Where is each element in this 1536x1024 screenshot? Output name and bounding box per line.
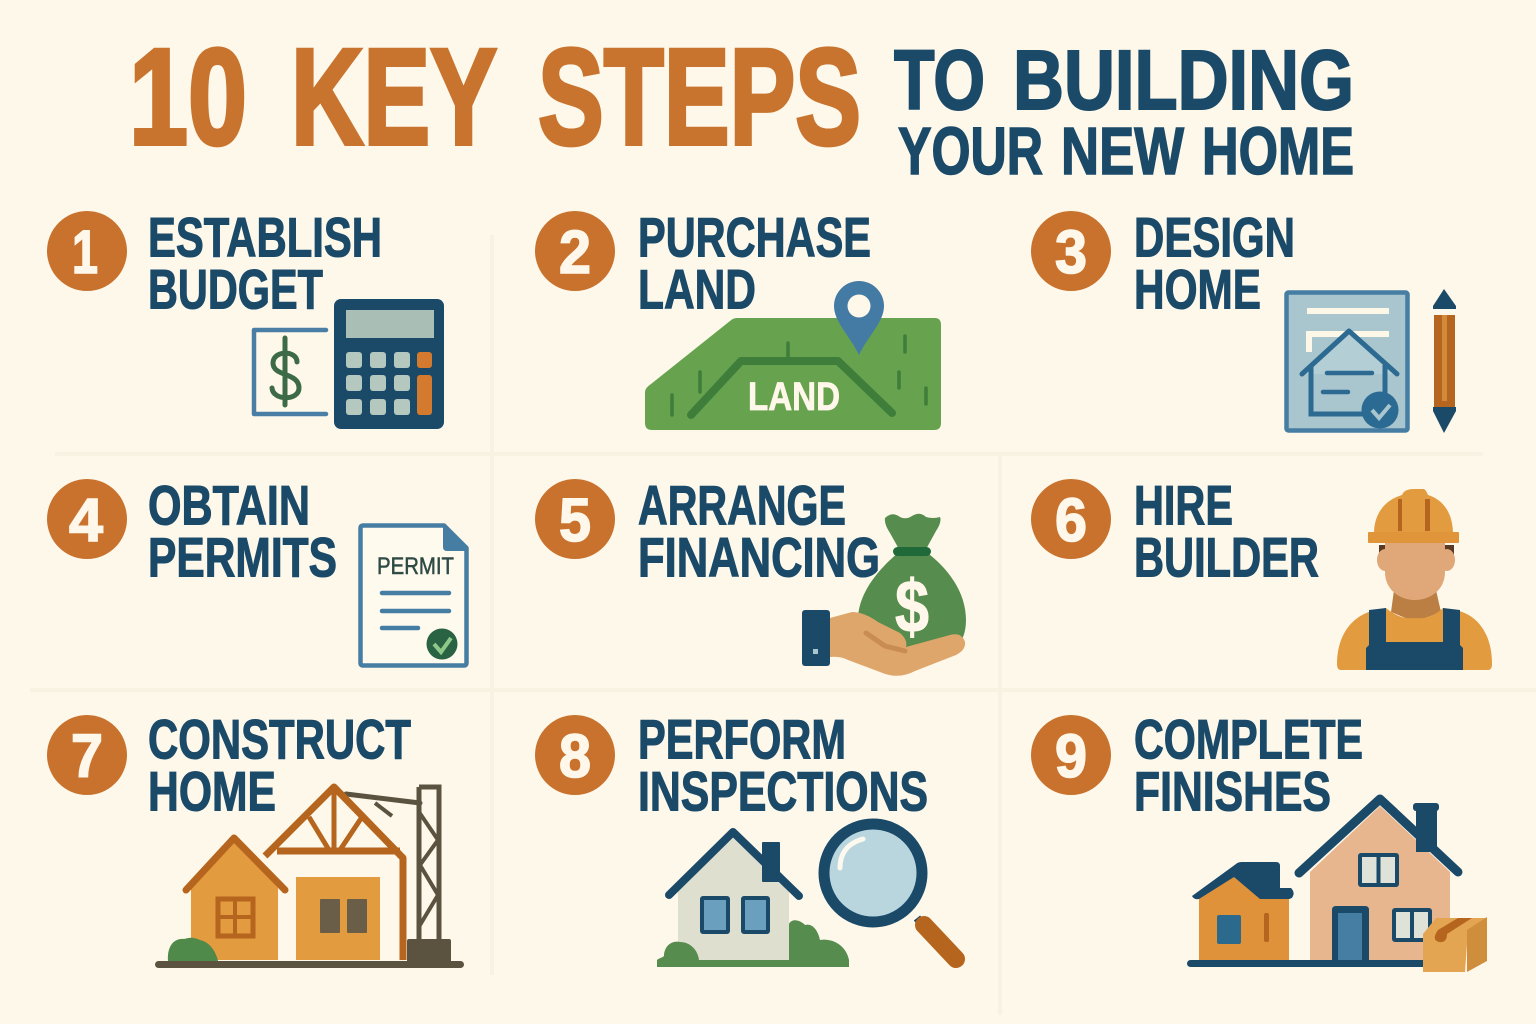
step label bbox=[638, 206, 871, 320]
step label: OBTAIN bbox=[148, 474, 310, 536]
panel: step 9 complete finishes bbox=[1031, 708, 1487, 972]
panel: step 5 arrange financing bbox=[535, 474, 966, 676]
icon: land plot with map pin: LAND bbox=[748, 375, 840, 419]
step label: HOME bbox=[1134, 258, 1261, 320]
panel: step 8 perform inspections bbox=[535, 708, 956, 967]
number badge 8 bbox=[535, 715, 615, 795]
step label: CONSTRUCT bbox=[148, 708, 411, 770]
number badge 3 bbox=[1031, 211, 1111, 291]
number badge 5: 5 bbox=[559, 486, 591, 554]
icon: house with magnifying glass bbox=[657, 824, 956, 967]
number badge 4 bbox=[47, 479, 127, 559]
heading: 10 key steps bbox=[129, 21, 861, 174]
number badge 7: 7 bbox=[71, 722, 103, 790]
number badge 1 bbox=[47, 211, 127, 291]
heading: 10 key steps: KEY bbox=[291, 21, 497, 174]
step label: BUDGET bbox=[148, 258, 323, 320]
step label: PERMITS bbox=[148, 526, 337, 588]
heading: to building: BUILDING bbox=[1013, 33, 1354, 127]
step label: HIRE bbox=[1134, 474, 1233, 536]
icon: permit document: PERMIT bbox=[377, 553, 454, 580]
step label: HOME bbox=[148, 760, 276, 822]
step label bbox=[1134, 474, 1319, 588]
step label bbox=[1134, 708, 1363, 822]
step label bbox=[638, 708, 928, 822]
step label bbox=[148, 474, 337, 588]
number badge 4: 4 bbox=[69, 486, 103, 554]
icon: house blueprint bbox=[1286, 292, 1408, 430]
step label: ESTABLISH bbox=[148, 206, 382, 268]
icon: money bag on hand: $ bbox=[895, 565, 929, 648]
heading: to building bbox=[894, 33, 1354, 127]
number badge 9 bbox=[1031, 715, 1111, 795]
step label bbox=[148, 206, 382, 320]
heading: to building: TO bbox=[894, 33, 985, 127]
step label: LAND bbox=[638, 258, 756, 320]
number badge 9: 9 bbox=[1055, 722, 1087, 790]
step label: PERFORM bbox=[638, 708, 846, 770]
number badge 7 bbox=[47, 715, 127, 795]
number badge 6 bbox=[1031, 479, 1111, 559]
number badge 2 bbox=[535, 211, 615, 291]
icon: money bag on hand bbox=[802, 514, 966, 676]
step label: COMPLETE bbox=[1134, 708, 1363, 770]
number badge 5 bbox=[535, 479, 615, 559]
step label: FINANCING bbox=[638, 526, 880, 588]
icon: permit document bbox=[360, 526, 467, 666]
number badge 2: 2 bbox=[559, 218, 591, 286]
icon: dollar frame and calculator bbox=[254, 299, 444, 429]
heading: 10 key steps: 10 bbox=[129, 21, 247, 174]
step label: PURCHASE bbox=[638, 206, 871, 268]
step label bbox=[148, 708, 411, 822]
panel: step 3 design home bbox=[1031, 206, 1456, 433]
heading: 10 key steps: STEPS bbox=[538, 21, 861, 174]
title bbox=[129, 21, 1354, 189]
heading: your new home: YOUR bbox=[898, 115, 1043, 189]
icon: land plot with map pin bbox=[645, 281, 941, 430]
panel: step 2 purchase land bbox=[535, 206, 941, 430]
icon: finished houses and box bbox=[1187, 799, 1487, 972]
icon: pencil bbox=[1433, 289, 1456, 433]
icon: builder with hard hat bbox=[1337, 489, 1492, 670]
number badge 6: 6 bbox=[1055, 486, 1087, 554]
step label: ARRANGE bbox=[638, 474, 846, 536]
step label bbox=[638, 474, 880, 588]
icon: house under construction with crane bbox=[155, 787, 464, 968]
number badge 3: 3 bbox=[1055, 218, 1087, 286]
heading: your new home: NEW bbox=[1061, 115, 1184, 189]
number badge 1: 1 bbox=[72, 218, 98, 286]
panel: step 6 hire builder bbox=[1031, 474, 1492, 670]
step label: INSPECTIONS bbox=[638, 760, 928, 822]
heading: your new home: HOME bbox=[1202, 115, 1354, 189]
step label: FINISHES bbox=[1134, 760, 1331, 822]
panel: step 4 obtain permits bbox=[47, 474, 467, 666]
step label: DESIGN bbox=[1134, 206, 1295, 268]
step label bbox=[1134, 206, 1295, 320]
number badge 8: 8 bbox=[559, 722, 591, 790]
panel: step 1 establish budget bbox=[47, 206, 444, 429]
heading: your new home bbox=[898, 115, 1354, 189]
step label: BUILDER bbox=[1134, 526, 1319, 588]
panel: step 7 construct home bbox=[47, 708, 464, 968]
